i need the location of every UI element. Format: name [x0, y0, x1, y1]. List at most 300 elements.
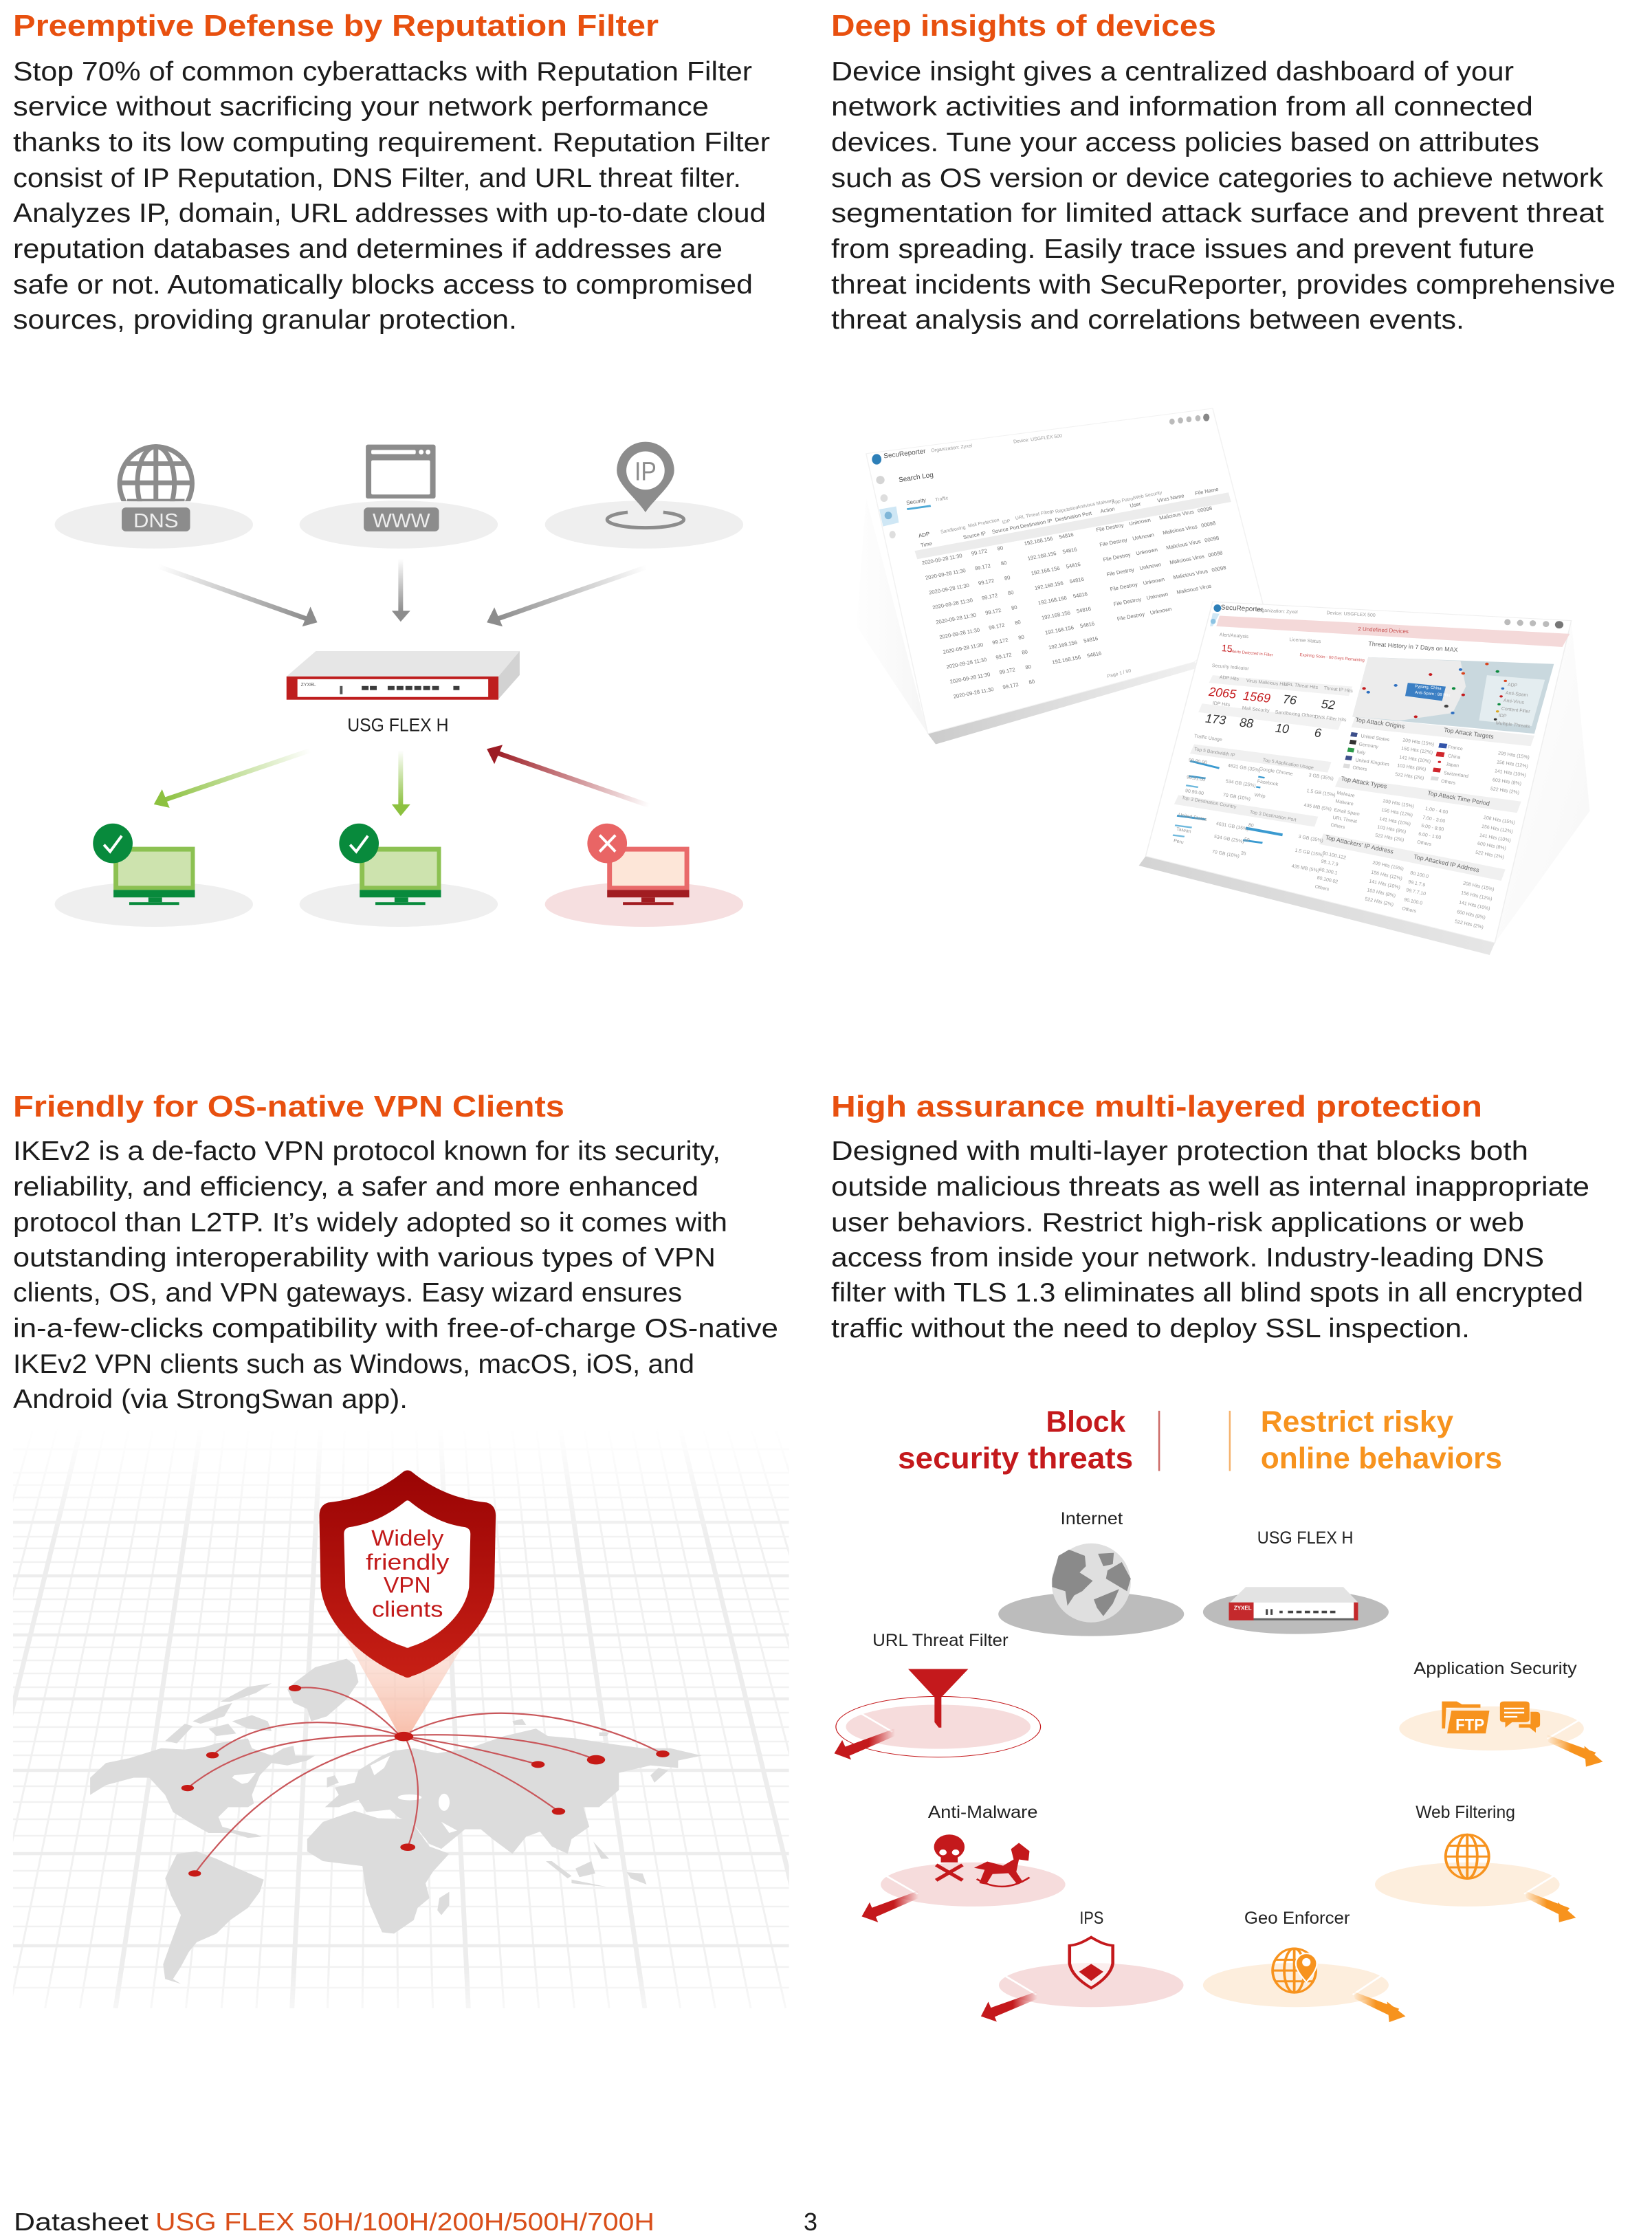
- table: search log rows: 99.172: [984, 607, 1002, 616]
- screenshot: SecuReporter search log: Organization: Zyxel: [931, 443, 973, 453]
- screenshot: SecuReporter dashboard: 600 Hits (8%): [1456, 910, 1486, 921]
- indicator numbers: 173: [1204, 712, 1226, 727]
- table: search log rows: Virus Name: [1156, 492, 1185, 504]
- node: geo enforcer: [1203, 1948, 1405, 2022]
- footer model list: USG FLEX 50H/100H/200H/500H/700H: [155, 2208, 654, 2236]
- screenshot: SecuReporter dashboard: 435 MB (5%): [1303, 803, 1332, 812]
- screenshot: SecuReporter dashboard: Others: [1330, 823, 1345, 830]
- arrow: firewall to safe device 2: [392, 750, 410, 816]
- screenshot: SecuReporter dashboard: Expiring Soon - 60 Days Remaining: [1299, 653, 1365, 663]
- screenshot: SecuReporter dashboard: Anti-Spam: [1506, 691, 1528, 698]
- screenshot: SecuReporter dashboard: 50: [1244, 837, 1250, 843]
- table: search log rows: Malicious Virus: [1165, 538, 1202, 551]
- table: search log rows: 2020-09-28 11:30: [935, 612, 977, 626]
- screenshot: SecuReporter dashboard: 156 Hits (12%): [1460, 890, 1493, 902]
- table: search log rows: 99.172: [978, 578, 995, 586]
- screenshots wrapper: [857, 408, 1589, 955]
- screenshot: SecuReporter dashboard: Anti-Virus: [1504, 699, 1525, 705]
- indicator numbers: 1569: [1242, 689, 1271, 705]
- heading: block security threats: Block: [1046, 1405, 1126, 1439]
- text block: IKEv2 description: Android (via StrongSwan app).: [13, 1385, 408, 1414]
- screenshot: SecuReporter dashboard: Top Attacked IP Address: [1413, 853, 1480, 874]
- screenshot: SecuReporter dashboard: 209 Hits (15%): [1497, 751, 1530, 760]
- screenshot: SecuReporter dashboard: 60.100.1: [1319, 868, 1338, 876]
- panel: preemptive defense by reputation filter: [13, 9, 770, 927]
- screenshot: SecuReporter dashboard: 522 Hits (2%): [1454, 919, 1484, 930]
- panel: friendly for OS-native VPN clients: [0, 1090, 998, 2008]
- screenshot: SecuReporter search log: IP Reputation: [1049, 505, 1079, 516]
- table: search log rows: 2020-09-28 11:30: [925, 567, 967, 581]
- screenshot: SecuReporter dashboard: United States: [1361, 734, 1390, 743]
- node: IPS: [981, 1937, 1183, 2021]
- screenshot: SecuReporter dashboard: ADP: [1508, 683, 1518, 688]
- arrow: DNS to firewall: [158, 567, 317, 626]
- table: search log rows: Unknown: [1149, 606, 1172, 616]
- table: search log rows: 80: [1004, 574, 1011, 582]
- screenshot: SecuReporter dashboard: 90.90.90: [1188, 758, 1208, 765]
- table: search log rows: Source Port: [991, 524, 1020, 535]
- screenshot: SecuReporter dashboard: Traffic Usage: [1193, 734, 1222, 743]
- screenshot: SecuReporter dashboard: Top 5 Bandwidth IP: [1193, 747, 1235, 758]
- heading: block security threats: security threats: [898, 1442, 1133, 1475]
- screenshot: SecuReporter dashboard: 141 Hits (10%): [1399, 755, 1431, 765]
- screenshot: SecuReporter dashboard: 209 Hits (15%): [1383, 799, 1414, 809]
- screenshot: SecuReporter dashboard: Multiple Threats: [1496, 721, 1530, 729]
- text block: device insight description: segmentation for limited attack surface and prevent threat: [831, 199, 1604, 228]
- device: safe monitor 2: [300, 824, 498, 927]
- threat map: [1352, 657, 1554, 734]
- node: URL threat filter: [835, 1669, 1041, 1759]
- arrow: WWW to firewall: [392, 559, 410, 622]
- screenshot: SecuReporter dashboard: 103 Hits (8%): [1377, 825, 1407, 835]
- table: search log rows: 54816: [1066, 561, 1081, 570]
- screenshot: SecuReporter search log: Web Security: [1134, 490, 1163, 501]
- text block: reputation filter description: service without sacrificing your network performance: [13, 92, 709, 122]
- table: search log rows: 80: [1007, 589, 1014, 596]
- screenshot: SecuReporter search log: Traffic: [935, 496, 949, 503]
- label: geo enforcer: Geo Enforcer: [1244, 1909, 1350, 1928]
- indicator numbers: 76: [1282, 692, 1297, 707]
- screenshot: SecuReporter dashboard: Google Chrome: [1259, 767, 1293, 777]
- screenshot: SecuReporter dashboard: China: [1448, 754, 1461, 760]
- screenshot: SecuReporter dashboard: 5:00 - 8:00: [1421, 824, 1444, 833]
- diagram: VPN world map: [13, 1470, 789, 2008]
- screenshot: SecuReporter dashboard: Email Spam: [1334, 808, 1360, 817]
- table: search log rows: 54816: [1076, 606, 1092, 615]
- table: search log rows: 2020-09-28 11:30: [943, 641, 984, 655]
- table: search log rows: File Name: [1194, 486, 1219, 496]
- screenshot: SecuReporter dashboard: Facebook: [1257, 779, 1279, 787]
- node: USG FLEX H: [1203, 1587, 1389, 1634]
- table: search log rows: Destination Port: [1055, 510, 1093, 523]
- screenshot: SecuReporter dashboard: Content Filter: [1501, 707, 1531, 714]
- text block: IKEv2 description: outstanding interoperability with various types of VPN: [13, 1243, 716, 1273]
- footer: [14, 2208, 817, 2236]
- screenshot: SecuReporter dashboard: SecuReporter: [1221, 604, 1264, 614]
- heading: restrict risky online behaviors: [1261, 1405, 1502, 1475]
- label: USG FLEX H: USG FLEX H: [1257, 1528, 1353, 1548]
- screenshot: SecuReporter dashboard: 522 Hits (2%): [1375, 833, 1405, 843]
- table: search log rows: File Destroy: [1095, 522, 1125, 533]
- screenshot: SecuReporter dashboard: Pyjiang, China: [1415, 685, 1442, 691]
- screenshot: SecuReporter search log: ADP: [918, 531, 930, 539]
- screenshot: SecuReporter search log: SecuReporter: [883, 448, 927, 460]
- screenshot: SecuReporter dashboard: 600 Hits (8%): [1477, 842, 1506, 851]
- screenshot: SecuReporter dashboard: 209 Hits (15%): [1402, 738, 1434, 747]
- screenshot: SecuReporter dashboard: Italy: [1356, 749, 1366, 756]
- screenshot: SecuReporter dashboard: Peru: [1173, 839, 1184, 845]
- heading: restrict risky online behaviors: online behaviors: [1261, 1442, 1502, 1475]
- screenshot: SecuReporter dashboard: 141 Hits (10%): [1369, 879, 1400, 890]
- icon text: FTP: FTP: [1455, 1716, 1484, 1735]
- screenshot: SecuReporter dashboard: Alerts Detected in Filter: [1230, 650, 1273, 657]
- screenshot: SecuReporter search log: Search Log: [898, 471, 934, 484]
- screenshot: SecuReporter dashboard: Others: [1402, 906, 1417, 914]
- table: search log rows: 00098: [1204, 535, 1220, 544]
- table: search log rows: Unknown: [1136, 547, 1158, 556]
- screenshot: SecuReporter dashboard: 70 GB (10%): [1211, 850, 1240, 859]
- table: search log rows: 192.168.156: [1041, 610, 1071, 621]
- table: search log rows: 2020-09-28 11:30: [953, 686, 994, 700]
- screenshot: SecuReporter dashboard: 80: [1248, 823, 1254, 828]
- screenshot: SecuReporter dashboard: 3 GB (35%): [1298, 835, 1323, 844]
- text block: multi-layer description: user behaviors. Restrict high-risk applications or web: [831, 1208, 1524, 1238]
- screenshot: SecuReporter dashboard: France: [1448, 745, 1463, 751]
- screenshot: SecuReporter dashboard: 156 Hits (12%): [1381, 808, 1413, 818]
- screenshot: SecuReporter dashboard: [1139, 602, 1589, 955]
- screenshot: SecuReporter dashboard: DNS Filter Hits: [1314, 715, 1347, 723]
- table: search log rows: 54816: [1083, 635, 1099, 644]
- table: search log rows: 99.172: [971, 548, 988, 557]
- screenshot: SecuReporter dashboard: 70 GB (10%): [1222, 793, 1251, 802]
- table: search log rows: 2020-09-28 11:30: [946, 657, 987, 670]
- table: search log rows: 99.172: [974, 562, 991, 571]
- screenshot: SecuReporter dashboard: Top 3 Destination Port: [1249, 810, 1297, 823]
- table: search log rows: Unknown: [1139, 561, 1162, 571]
- table: search log rows: 00098: [1211, 564, 1226, 573]
- screenshot: SecuReporter dashboard: 141 Hits (10%): [1479, 833, 1511, 844]
- screenshot: SecuReporter dashboard: Malware: [1336, 791, 1355, 799]
- label: application security: Application Security: [1413, 1659, 1577, 1678]
- screenshot: SecuReporter dashboard: 80.100.02: [1317, 876, 1339, 885]
- table: search log rows: Malicious Virus: [1158, 509, 1195, 521]
- screenshot: SecuReporter dashboard: United States: [1178, 813, 1207, 822]
- table: search log rows: 80: [1000, 560, 1007, 567]
- table: search log rows: Malicious Virus: [1173, 568, 1209, 580]
- shield callout: widely friendly VPN clients: Widely: [371, 1525, 444, 1550]
- table: search log rows: Destination IP: [1020, 518, 1053, 529]
- screenshot: SecuReporter search log: IDP: [1002, 519, 1011, 525]
- screenshot: SecuReporter search log: Device: USGFLEX 500: [1013, 434, 1063, 445]
- screenshot: SecuReporter dashboard: Top 5 Application Usage: [1262, 758, 1314, 771]
- screenshot: SecuReporter dashboard: 603 Hits (8%): [1492, 778, 1521, 787]
- label: USG FLEX H: USG FLEX H: [347, 714, 448, 735]
- screenshot: SecuReporter dashboard: Security Indicator: [1212, 663, 1250, 672]
- indicator numbers: 2065: [1207, 685, 1237, 701]
- table: search log rows: 54816: [1072, 591, 1088, 600]
- text block: reputation filter description: safe or not. Automatically blocks access to compromised: [13, 270, 753, 300]
- source: WWW: WWW: [373, 510, 430, 532]
- table: search log rows: 00098: [1200, 520, 1216, 529]
- screenshot: SecuReporter dashboard: Malware: [1335, 799, 1354, 807]
- table: search log rows: 99.172: [1002, 681, 1020, 690]
- screenshot: SecuReporter dashboard: 99.1.7.9: [1321, 859, 1339, 868]
- shield callout: widely friendly VPN clients: friendly: [366, 1549, 450, 1574]
- diagram: reputation filter flow: [55, 442, 743, 927]
- screenshot: SecuReporter dashboard: 80.100.0: [1410, 871, 1429, 879]
- table: search log rows: 54816: [1069, 576, 1085, 584]
- screenshot: SecuReporter dashboard: Top Attack Targets: [1444, 727, 1495, 740]
- table: search log rows: 54816: [1062, 546, 1078, 555]
- text block: IKEv2 description: IKEv2 is a de-facto VPN protocol known for its security,: [13, 1137, 720, 1166]
- screenshot: SecuReporter dashboard: 103 Hits (8%): [1397, 763, 1427, 772]
- text block: multi-layer description: Designed with multi-layer protection that blocks both: [831, 1137, 1528, 1166]
- text block: IKEv2 description: clients, OS, and VPN gateways. Easy wizard ensures: [13, 1278, 682, 1308]
- table: search log rows: 99.172: [995, 652, 1012, 661]
- indicator numbers: [1204, 685, 1336, 740]
- table: search log rows: 192.168.156: [1034, 580, 1064, 591]
- label: web filtering: Web Filtering: [1416, 1803, 1515, 1822]
- screenshot: SecuReporter search log: Security: [906, 497, 927, 506]
- screenshot: SecuReporter dashboard: Top 3 Destination Country: [1181, 795, 1237, 810]
- screenshot: SecuReporter dashboard: Alert/Analysis: [1220, 633, 1249, 639]
- device: USG FLEX H firewall: ZYXEL: [301, 683, 316, 688]
- table: search log rows: 2020-09-28 11:30: [949, 671, 991, 685]
- text block: multi-layer description: access from inside your network. Industry-leading DNS: [831, 1243, 1544, 1273]
- table: search log rows: File Destroy: [1113, 596, 1142, 607]
- screenshot: SecuReporter dashboard: 522 Hits (2%): [1365, 897, 1394, 908]
- node: anti-malware: [861, 1834, 1066, 1922]
- table: search log rows: 2020-09-28 11:30: [932, 597, 973, 611]
- screenshot: SecuReporter dashboard: 141 Hits (10%): [1379, 817, 1411, 827]
- screenshot: SecuReporter search log: Page 1 / 50: [1107, 668, 1132, 679]
- text block: reputation filter description: sources, providing granular protection.: [13, 305, 517, 335]
- table: search log rows: Malicious Virus: [1162, 523, 1198, 536]
- table: search log rows: 192.168.156: [1048, 639, 1078, 650]
- indicator numbers: 88: [1239, 716, 1254, 731]
- table: search log rows: 192.168.156: [1027, 550, 1057, 562]
- table: search log rows: 54816: [1059, 531, 1074, 540]
- label: URL threat filter: URL Threat Filter: [872, 1631, 1009, 1650]
- text block: multi-layer description: [831, 1137, 1589, 1343]
- text block: IKEv2 description: in-a-few-clicks compatibility with free-of-charge OS-native: [13, 1314, 778, 1343]
- screenshot: SecuReporter dashboard: Whip: [1254, 793, 1266, 799]
- screenshot: SecuReporter dashboard: 141 Hits (10%): [1494, 769, 1526, 778]
- table: search log rows: Time: [920, 540, 933, 549]
- screenshot: SecuReporter dashboard: 522 Hits (2%): [1475, 850, 1504, 860]
- table: search log rows: Unknown: [1128, 517, 1152, 527]
- icons and platforms: [835, 1544, 1603, 2022]
- heading: preemptive defense: Preemptive Defense by Reputation Filter: [13, 9, 659, 43]
- screenshot: SecuReporter dashboard: 90.100.0: [1404, 897, 1423, 906]
- screenshot: SecuReporter dashboard: Others: [1417, 840, 1432, 847]
- device: USG FLEX H firewall: [287, 651, 520, 700]
- label: internet: Internet: [1060, 1509, 1123, 1528]
- shield callout: widely friendly VPN clients: VPN: [384, 1572, 431, 1598]
- table: search log rows: 80: [1017, 634, 1025, 641]
- screenshot: SecuReporter dashboard: 208 Hits (15%): [1483, 815, 1515, 826]
- source: IP: [545, 442, 743, 549]
- source: DNS: [55, 447, 253, 549]
- text block: device insight description: network activities and information from all connected: [831, 92, 1533, 122]
- device: safe monitor 1: [55, 824, 253, 927]
- table: search log rows: 192.168.156: [1031, 565, 1060, 576]
- screenshot: SecuReporter dashboard: 99.1.7.9: [1408, 879, 1426, 888]
- screenshot: SecuReporter dashboard: 522 Hits (2%): [1395, 772, 1424, 781]
- table: search log rows: 99.172: [999, 666, 1016, 676]
- screenshot: SecuReporter dashboard: URL Threat: [1332, 815, 1357, 824]
- screenshot: SecuReporter dashboard: Top Attackers' IP Address: [1325, 834, 1395, 855]
- indicator numbers: 52: [1321, 697, 1336, 712]
- screenshot: SecuReporter dashboard: 522 Hits (2%): [1490, 787, 1519, 795]
- screenshot: SecuReporter search log: Antivirus Malware: [1077, 498, 1115, 510]
- shield callout: widely friendly VPN clients: [319, 1471, 496, 1678]
- text block: device insight description: devices. Tune your access policies based on attributes: [831, 128, 1539, 157]
- screenshot: SecuReporter dashboard: 156 Hits (12%): [1496, 760, 1528, 769]
- screenshot: SecuReporter dashboard: 4631 GB (35%): [1227, 763, 1261, 773]
- heading: deep insights: Deep insights of devices: [831, 9, 1216, 43]
- arrow: IP to firewall: [487, 567, 647, 626]
- screenshot: SecuReporter dashboard: Sandboxing Others: [1275, 710, 1317, 719]
- source: WWW: [300, 445, 498, 549]
- screenshot: SecuReporter dashboard: Anti-Spam : 88 Hits: [1415, 691, 1451, 698]
- text block: device insight description: from spreading. Easily trace issues and prevent future: [831, 234, 1534, 264]
- table: search log rows: 80: [1021, 648, 1028, 656]
- screenshot: SecuReporter search log: Mail Protection: [968, 518, 1000, 529]
- text block: IKEv2 description: protocol than L2TP. It’s widely adopted so it comes with: [13, 1208, 727, 1238]
- screenshot: SecuReporter dashboard: 435 MB (5%): [1291, 864, 1319, 873]
- table: search log rows: Malicious Virus: [1176, 583, 1212, 595]
- shield callout: widely friendly VPN clients: clients: [372, 1596, 443, 1621]
- table: search log rows: [917, 486, 1255, 700]
- heading: OS-native VPN: Friendly for OS-native VPN Clients: [13, 1090, 564, 1123]
- table: search log rows: 80: [1025, 663, 1032, 670]
- screenshot: SecuReporter dashboard: 90.91.00: [1186, 775, 1206, 782]
- screenshot: SecuReporter dashboard: 7:00 - 3:00: [1422, 815, 1446, 824]
- text block: reputation filter description: consist of IP Reputation, DNS Filter, and URL threat filter.: [13, 164, 741, 193]
- screenshot: SecuReporter dashboard: United Kingdom: [1355, 758, 1389, 767]
- screenshot: SecuReporter dashboard: 103 Hits (8%): [1367, 888, 1396, 899]
- table: search log rows: 80: [1028, 679, 1035, 685]
- table: search log rows: Unknown: [1132, 531, 1155, 542]
- screenshot: SecuReporter dashboard: Device: USGFLEX 500: [1326, 611, 1376, 618]
- table: search log rows: 2020-09-28 11:30: [939, 627, 980, 640]
- text block: device insight description: threat incidents with SecuReporter, provides comprehensive: [831, 270, 1616, 300]
- table: search log rows: 2020-09-28 11:30: [921, 553, 963, 566]
- source: IP: IP: [635, 457, 657, 486]
- text block: device insight description: [831, 57, 1616, 335]
- table: search log rows: File Destroy: [1116, 611, 1145, 622]
- table: search log rows: 192.168.156: [1024, 536, 1053, 547]
- text block: multi-layer description: traffic without the need to deploy SSL inspection.: [831, 1314, 1470, 1343]
- table: search log rows: Unknown: [1146, 591, 1169, 601]
- node: application security: [1399, 1702, 1603, 1767]
- table: search log rows: 00098: [1197, 505, 1213, 514]
- screenshot: SecuReporter dashboard: 141 Hits (10%): [1458, 900, 1490, 912]
- diagram: layered protection: [835, 1405, 1603, 2022]
- screenshot: SecuReporter dashboard: 35: [1240, 851, 1246, 857]
- screenshot: SecuReporter dashboard: Threat IP Hits: [1323, 686, 1354, 694]
- screenshot: SecuReporter dashboard: License Status: [1289, 637, 1321, 644]
- table: search log rows: Unknown: [1143, 576, 1165, 586]
- arrow: blocked device to firewall: [487, 745, 650, 806]
- screenshot: SecuReporter dashboard: 209 Hits (15%): [1372, 861, 1404, 872]
- text block: multi-layer description: filter with TLS 1.3 eliminates all blind spots in all encrypted: [831, 1278, 1583, 1308]
- screenshot: SecuReporter dashboard: 1.5 GB (15%): [1295, 848, 1324, 858]
- table: search log rows: File Destroy: [1103, 551, 1132, 563]
- text block: reputation filter description: Analyzes IP, domain, URL addresses with up-to-date cloud: [13, 199, 766, 228]
- screenshot: SecuReporter dashboard: 534 GB (25%): [1213, 835, 1244, 844]
- node: internet: [998, 1544, 1184, 1636]
- table: search log rows: File Destroy: [1110, 581, 1138, 593]
- table: search log rows: Malicious Virus: [1169, 553, 1205, 566]
- label: IPS: IPS: [1079, 1909, 1103, 1928]
- icon text: ZYXEL: ZYXEL: [1234, 1605, 1252, 1611]
- screenshot: SecuReporter dashboard: 90.90.00: [1185, 789, 1204, 796]
- screenshot: SecuReporter dashboard: Mail Security: [1242, 706, 1270, 714]
- text block: device insight description: such as OS version or device categories to achieve network: [831, 164, 1604, 193]
- source: DNS: DNS: [133, 510, 179, 532]
- screenshot: SecuReporter dashboard: 99.7.7.10: [1406, 888, 1427, 897]
- table: search log rows: 99.172: [981, 592, 998, 602]
- screenshot: SecuReporter search log: URL Threat Filter: [1015, 509, 1053, 521]
- text block: IKEv2 description: IKEv2 VPN clients such as Windows, macOS, iOS, and: [13, 1350, 694, 1379]
- indicator numbers: 10: [1275, 721, 1290, 736]
- screenshot: SecuReporter dashboard: Germany: [1358, 742, 1379, 749]
- arrow: firewall to safe device 1: [154, 750, 311, 808]
- screenshot: SecuReporter dashboard: 4631 GB (35%): [1215, 822, 1249, 832]
- table: search log rows: 00098: [1207, 549, 1223, 558]
- table: search log rows: 192.168.156: [1037, 595, 1068, 606]
- panel: high assurance multi-layered protection: [831, 1090, 1603, 2022]
- screenshot: SecuReporter dashboard: Others: [1441, 779, 1456, 786]
- text block: IKEv2 description: reliability, and efficiency, a safer and more enhanced: [13, 1172, 698, 1202]
- text block: reputation filter description: [13, 57, 770, 335]
- text block: IKEv2 description: [13, 1137, 778, 1414]
- table: search log rows: 192.168.156: [1051, 654, 1081, 666]
- device: blocked monitor: [545, 824, 743, 927]
- screenshot: SecuReporter dashboard: 208 Hits (15%): [1462, 881, 1495, 892]
- table: search log rows: 80: [1011, 604, 1018, 611]
- screenshot: SecuReporter dashboard: Virus Malicious Hits: [1246, 679, 1288, 688]
- screenshot: SecuReporter dashboard: URL Threat Hits: [1284, 682, 1319, 690]
- screenshot: SecuReporter dashboard: Organization: Zyxel: [1256, 608, 1298, 615]
- table: search log rows: Action: [1100, 506, 1115, 514]
- table: search log rows: User: [1129, 501, 1142, 509]
- table: search log rows: File Destroy: [1099, 537, 1128, 548]
- screenshot: SecuReporter dashboard: Top Attack Time Period: [1427, 789, 1490, 807]
- screenshot: SecuReporter dashboard: 156 Hits (12%): [1481, 824, 1513, 835]
- screenshot: SecuReporter dashboard: Switzerland: [1444, 771, 1468, 779]
- screenshot: SecuReporter dashboard: 3 GB (35%): [1308, 773, 1334, 782]
- screenshot: SecuReporter dashboard: 60.100.122: [1322, 851, 1347, 861]
- screenshot: SecuReporter dashboard: 2 Undefined Devices: [1358, 626, 1409, 635]
- screenshot: SecuReporter dashboard: 156 Hits (12%): [1401, 746, 1433, 756]
- table: search log rows: 80: [997, 545, 1004, 552]
- screenshot: SecuReporter dashboard: Others: [1352, 765, 1367, 772]
- table: search log rows: 99.172: [991, 637, 1009, 646]
- heading: multi-layered protection: High assurance multi-layered protection: [831, 1090, 1482, 1123]
- screenshot: SecuReporter dashboard: 15: [1221, 642, 1233, 654]
- table: search log rows: Source IP: [962, 530, 987, 540]
- screenshot: SecuReporter dashboard: Top Attack Origins: [1355, 716, 1405, 730]
- screenshot: SecuReporter dashboard: Japan: [1446, 762, 1460, 769]
- text block: multi-layer description: outside malicious threats as well as internal inappropriate: [831, 1172, 1589, 1202]
- screenshot: SecuReporter search log: App Patrol: [1112, 496, 1135, 505]
- text block: reputation filter description: Stop 70% of common cyberattacks with Reputation Filter: [13, 57, 752, 87]
- table: search log rows: 192.168.156: [1044, 624, 1075, 636]
- screenshot: SecuReporter dashboard: 1:00 - 4:00: [1425, 806, 1449, 815]
